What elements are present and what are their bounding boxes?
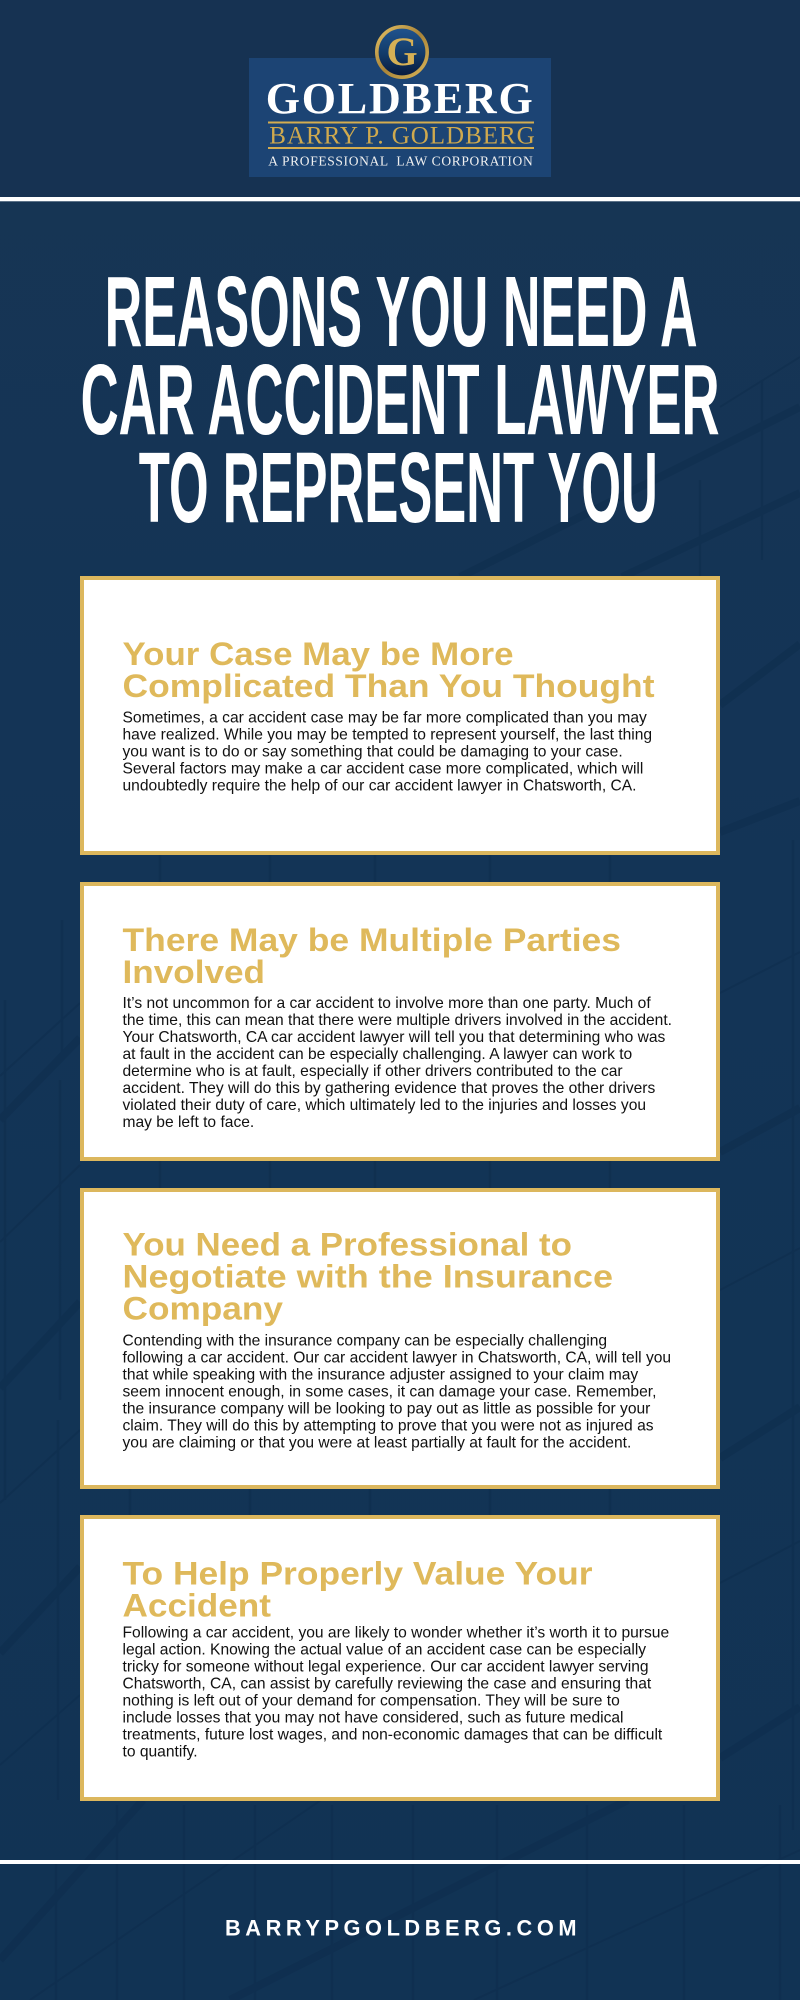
panel: multiple parties [82,884,718,1159]
body text: the time, this can mean that there were multiple drivers involved in the accident. [122,1012,672,1029]
heading: Accident [122,1588,271,1624]
body text: claim. They will do this by attempting to prove that you were not as injured as [122,1418,654,1435]
logo rule top [268,122,534,124]
body text: include losses that you may not have considered, such as future medical [122,1710,624,1726]
heading [122,922,621,990]
body text: Several factors may make a car accident case more complicated, which will [122,760,643,778]
logo tagline: A PROFESSIONAL LAW CORPORATION [268,154,533,169]
heading: There May be Multiple Parties [122,922,621,958]
body text: that while speaking with the insurance adjuster assigned to your claim may [122,1367,638,1384]
heading: Involved [122,954,265,990]
body text: have realized. While you may be tempted to represent yourself, the last thing [122,726,652,744]
heading: Complicated Than You Thought [122,668,655,704]
body text [122,1624,669,1760]
body text: Contending with the insurance company can be especially challenging [122,1333,607,1350]
logo plate [249,58,551,177]
heading: To Help Properly Value Your [122,1556,593,1592]
body text: tricky for someone without legal experience. Our car accident lawyer serving [122,1658,649,1676]
icon: gold G medallion [377,27,427,77]
heading: Your Case May be More [122,636,514,672]
heading: Negotiate with the Insurance [122,1259,613,1295]
bottom divider line [0,1860,800,1864]
body text: determine who is at fault, especially if other drivers contributed to the car [122,1063,623,1080]
body text: nothing is left out of your demand for compensation. They will be sure to [122,1692,620,1710]
heading: You Need a Professional to [122,1227,572,1263]
body text: accident. They will do this by gathering evidence that proves the other drivers [122,1080,655,1097]
logo [249,27,551,177]
icon: gold G medallion: G [386,29,418,74]
logo wordmark: GOLDBERG [266,74,533,123]
heading: Company [122,1291,283,1327]
body text [122,1333,671,1452]
body text: It’s not uncommon for a car accident to involve more than one party. Much of [122,995,651,1012]
panel: insurance negotiation [82,1190,718,1487]
panel: value your accident [82,1517,718,1799]
logo rule bottom [268,147,534,149]
heading [122,636,655,704]
body text: may be left to face. [122,1114,254,1131]
body text: at fault in the accident can be especially challenging. A lawyer can work to [122,1046,633,1063]
body text: treatments, future lost wages, and non-economic damages that can be difficult [122,1726,663,1744]
logo sub name: BARRY P. GOLDBERG [269,122,535,149]
body text: following a car accident. Our car accident lawyer in Chatsworth, CA, will tell you [122,1350,671,1367]
body text [122,710,652,794]
body text: to quantify. [122,1744,198,1760]
top divider line [0,197,800,201]
body text: legal action. Knowing the actual value of an accident case can be especially [122,1642,646,1658]
body text: Following a car accident, you are likely to wonder whether it’s worth it to pursue [122,1624,669,1642]
body text: the insurance company will be looking to pay out as little as possible for your [122,1401,650,1418]
body text: Sometimes, a car accident case may be far more complicated than you may [122,710,647,726]
body text: violated their duty of care, which ultimately led to the injuries and losses you [122,1097,646,1114]
heading [122,1556,593,1624]
body text: seem innocent enough, in some cases, it can damage your case. Remember, [122,1384,656,1401]
body text: you are claiming or that you were at least partially at fault for the accident. [122,1435,631,1452]
footer website: BARRYPGOLDBERG.COM [225,1916,576,1941]
body text: undoubtedly require the help of our car accident lawyer in Chatsworth, CA. [122,778,637,794]
body text: you want is to do or say something that could be damaging to your case. [122,744,623,760]
body text: Your Chatsworth, CA car accident lawyer will tell you that determining who was [122,1029,666,1046]
body text: Chatsworth, CA, can assist by carefully reviewing the case and ensuring that [122,1676,652,1692]
header band [0,0,800,197]
body text [122,995,672,1131]
heading [122,1227,613,1327]
panel: complicated case [82,578,718,853]
title [81,256,720,544]
